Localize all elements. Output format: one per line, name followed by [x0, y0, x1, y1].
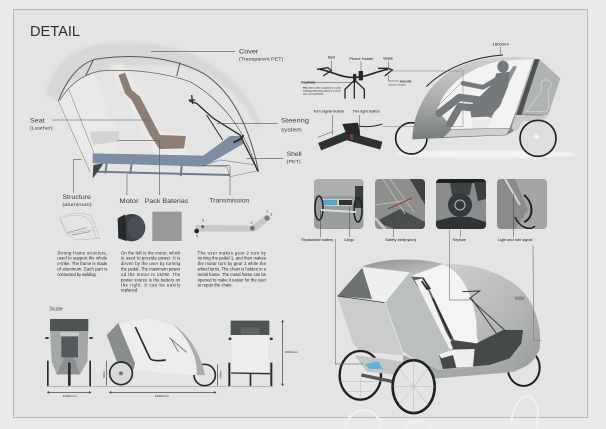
panel: large perspective render [335, 230, 541, 428]
dimension labels: 500mm [220, 371, 222, 378]
handlebar diagram: Brake [383, 56, 393, 60]
opening [413, 264, 477, 343]
text block: structure: used to support the whole [57, 256, 108, 261]
dimension labels: 500mm [104, 371, 106, 378]
text block: transmission: metal frame. The metal frame can be [198, 272, 267, 277]
part labels: Cover [239, 49, 258, 56]
part labels: Seat [30, 117, 45, 124]
thumbnail: keyhole [436, 179, 486, 229]
front wheel [393, 360, 435, 413]
heading: scale: Scale [49, 307, 63, 313]
icon: motor [118, 214, 145, 241]
sill [443, 128, 510, 137]
icon: transmission chain [194, 210, 272, 238]
ground line [47, 385, 273, 387]
rear wheel [520, 120, 556, 156]
part labels: Steering [281, 117, 310, 124]
handlebar diagram: Keyhole [301, 80, 315, 84]
thumbnail labels: Keyhole [453, 238, 466, 242]
tubular frame [58, 57, 258, 172]
seat and belts [436, 349, 475, 368]
floor reflection [346, 396, 538, 428]
far wheel [508, 349, 540, 386]
part labels: (PET) [287, 159, 301, 164]
part labels: Structure [62, 195, 92, 201]
driver silhouette [439, 61, 510, 124]
drive axle [361, 375, 393, 382]
part labels: Transmission [209, 198, 250, 205]
battery deck [355, 355, 403, 375]
text block: transmission: turning the pedal 1, and then makes [198, 256, 266, 261]
rear view [228, 321, 273, 386]
steering system [189, 95, 258, 172]
lower rear [511, 115, 548, 132]
panel: component images and descriptions [57, 210, 272, 293]
body shell [412, 57, 560, 139]
text block: motor and battery: On the left is the motor, which [121, 250, 181, 255]
ground reflection [396, 150, 576, 158]
text block: transmission: the motor turn by gear 3 while the [198, 261, 267, 266]
icon: transmission chain: 4 [196, 234, 198, 238]
outline [426, 55, 503, 87]
text block: motor and battery: the right. It can be easily [121, 282, 181, 287]
icon: transmission chain: 2 [251, 221, 253, 225]
icon: transmission chain: 3 [202, 219, 204, 223]
dimension labels: 2200mm [155, 394, 170, 398]
right shell [436, 264, 540, 378]
handlebar diagram: locking pedal and system to ensure [303, 89, 341, 92]
part labels: system [281, 128, 302, 134]
icon: transmission chain: 3 [270, 213, 272, 217]
handlebar diagram: When the e-trike is started, it is only [303, 86, 341, 89]
side panel [385, 272, 453, 375]
front wheel [396, 123, 427, 154]
spokes [340, 361, 435, 413]
dimension labels: 1000mm [63, 394, 77, 398]
thumbnail: replaceable battery [314, 179, 364, 229]
text block: motor and battery: replaced. [121, 288, 138, 293]
replaceable battery [365, 361, 383, 369]
handlebar diagram: Material: Rubber [389, 84, 406, 87]
handlebar diagram: Bell [328, 56, 335, 60]
front view [45, 319, 93, 386]
side view trike: 1600mm [492, 42, 509, 46]
icon: battery pack [152, 212, 182, 241]
text block: structure [57, 250, 108, 277]
dimension lines [47, 320, 284, 393]
edge line [337, 296, 385, 303]
lower ribs [93, 163, 230, 176]
thumbnail: safety belt [375, 179, 425, 229]
thumbnail labels: Safety belt(nylon) [385, 238, 416, 242]
handlebar diagram: Handle [400, 79, 412, 83]
text block: structure: of aluminum. Each part is [57, 267, 107, 272]
side dark trim [411, 277, 455, 341]
part labels: (Transparent PET) [239, 56, 284, 61]
seat base ghost [89, 131, 119, 145]
blue main chassis [93, 136, 244, 167]
thumbnail: light and turn signal [497, 179, 547, 229]
panel: scale drawings [45, 307, 298, 398]
text block: motor and battery: is used to provide power. It is [121, 256, 180, 261]
handlebar diagram: Phone Holder [349, 57, 374, 61]
grip close-up: Turn signal button [313, 110, 344, 114]
seat cushion ghost [59, 72, 118, 163]
thumbnail labels [301, 193, 533, 242]
text block: motor and battery: power source is the battery on [121, 277, 181, 282]
side view trike [383, 42, 560, 156]
grip close-up: The light button [353, 110, 380, 114]
steering rod [383, 71, 463, 127]
text block: transmission: The user makes gear 2 turn by [198, 250, 267, 255]
leader lines [335, 230, 541, 364]
text block: motor and battery: the pedal. The maximum power [121, 267, 181, 272]
side view [107, 319, 215, 386]
text block: structure: e-trike. The frame is made [57, 261, 108, 266]
handlebar diagram: user's personal theft. [303, 92, 324, 95]
rear hub [534, 134, 539, 139]
icon: structure sketch [60, 213, 100, 240]
grip close-up [313, 110, 382, 147]
thumbnail labels: Cargo [344, 238, 354, 242]
text block: structure: connected by welding. [57, 272, 97, 277]
text block: transmission: opened to make it easier for the user [198, 277, 267, 282]
rear panel [523, 59, 560, 115]
panel: exploded cutaway of the trike [30, 43, 310, 208]
cockpit floor [438, 330, 523, 369]
rear panel [337, 296, 403, 355]
rear dark triangle [337, 268, 372, 299]
steering rods [462, 291, 506, 333]
dimension labels [63, 350, 298, 398]
part labels: (aluminum) [62, 202, 92, 208]
part labels: Pack Baterias [145, 198, 188, 205]
handlebar diagram [301, 56, 412, 99]
text block: structure: Strong frame structure, [57, 250, 107, 255]
cover: transparent PET band [46, 43, 262, 127]
roof [362, 260, 443, 275]
thumbnail labels: Replaceable battery [301, 238, 333, 242]
lamp [515, 297, 524, 300]
title: DETAIL [30, 24, 80, 40]
rear left wheel [340, 351, 381, 400]
dimension labels: 1600mm [284, 350, 298, 354]
part labels: Motor [119, 198, 139, 205]
text block: transmission [198, 250, 267, 287]
text block: motor and battery: driven by the user by turning [121, 261, 181, 266]
height dimension [499, 47, 501, 55]
window [437, 59, 533, 129]
icon: transmission chain: 1 [266, 210, 268, 214]
seat [481, 66, 517, 118]
thumbnail labels: Light and turn signal [498, 238, 533, 242]
text block: motor and battery: od the motor is 150W. The [121, 272, 181, 277]
dark strip [516, 59, 540, 115]
underside and lower skirt [403, 355, 516, 378]
part labels: Shell [287, 151, 302, 158]
text block: motor and battery [121, 250, 181, 293]
ghost backrest [110, 63, 187, 157]
rear window [362, 268, 410, 303]
part labels [30, 49, 310, 208]
text block: transmission: to repair the chain. [198, 282, 233, 287]
text block: transmission: wheel turns. The chain is hidden in a [198, 267, 267, 272]
child outline [526, 80, 551, 112]
part labels: (Leather) [30, 125, 53, 130]
panel: handlebar and side view [301, 42, 576, 158]
panel: detail thumbnails [301, 179, 547, 242]
seat: leather [118, 73, 186, 149]
leader lines [52, 51, 283, 195]
